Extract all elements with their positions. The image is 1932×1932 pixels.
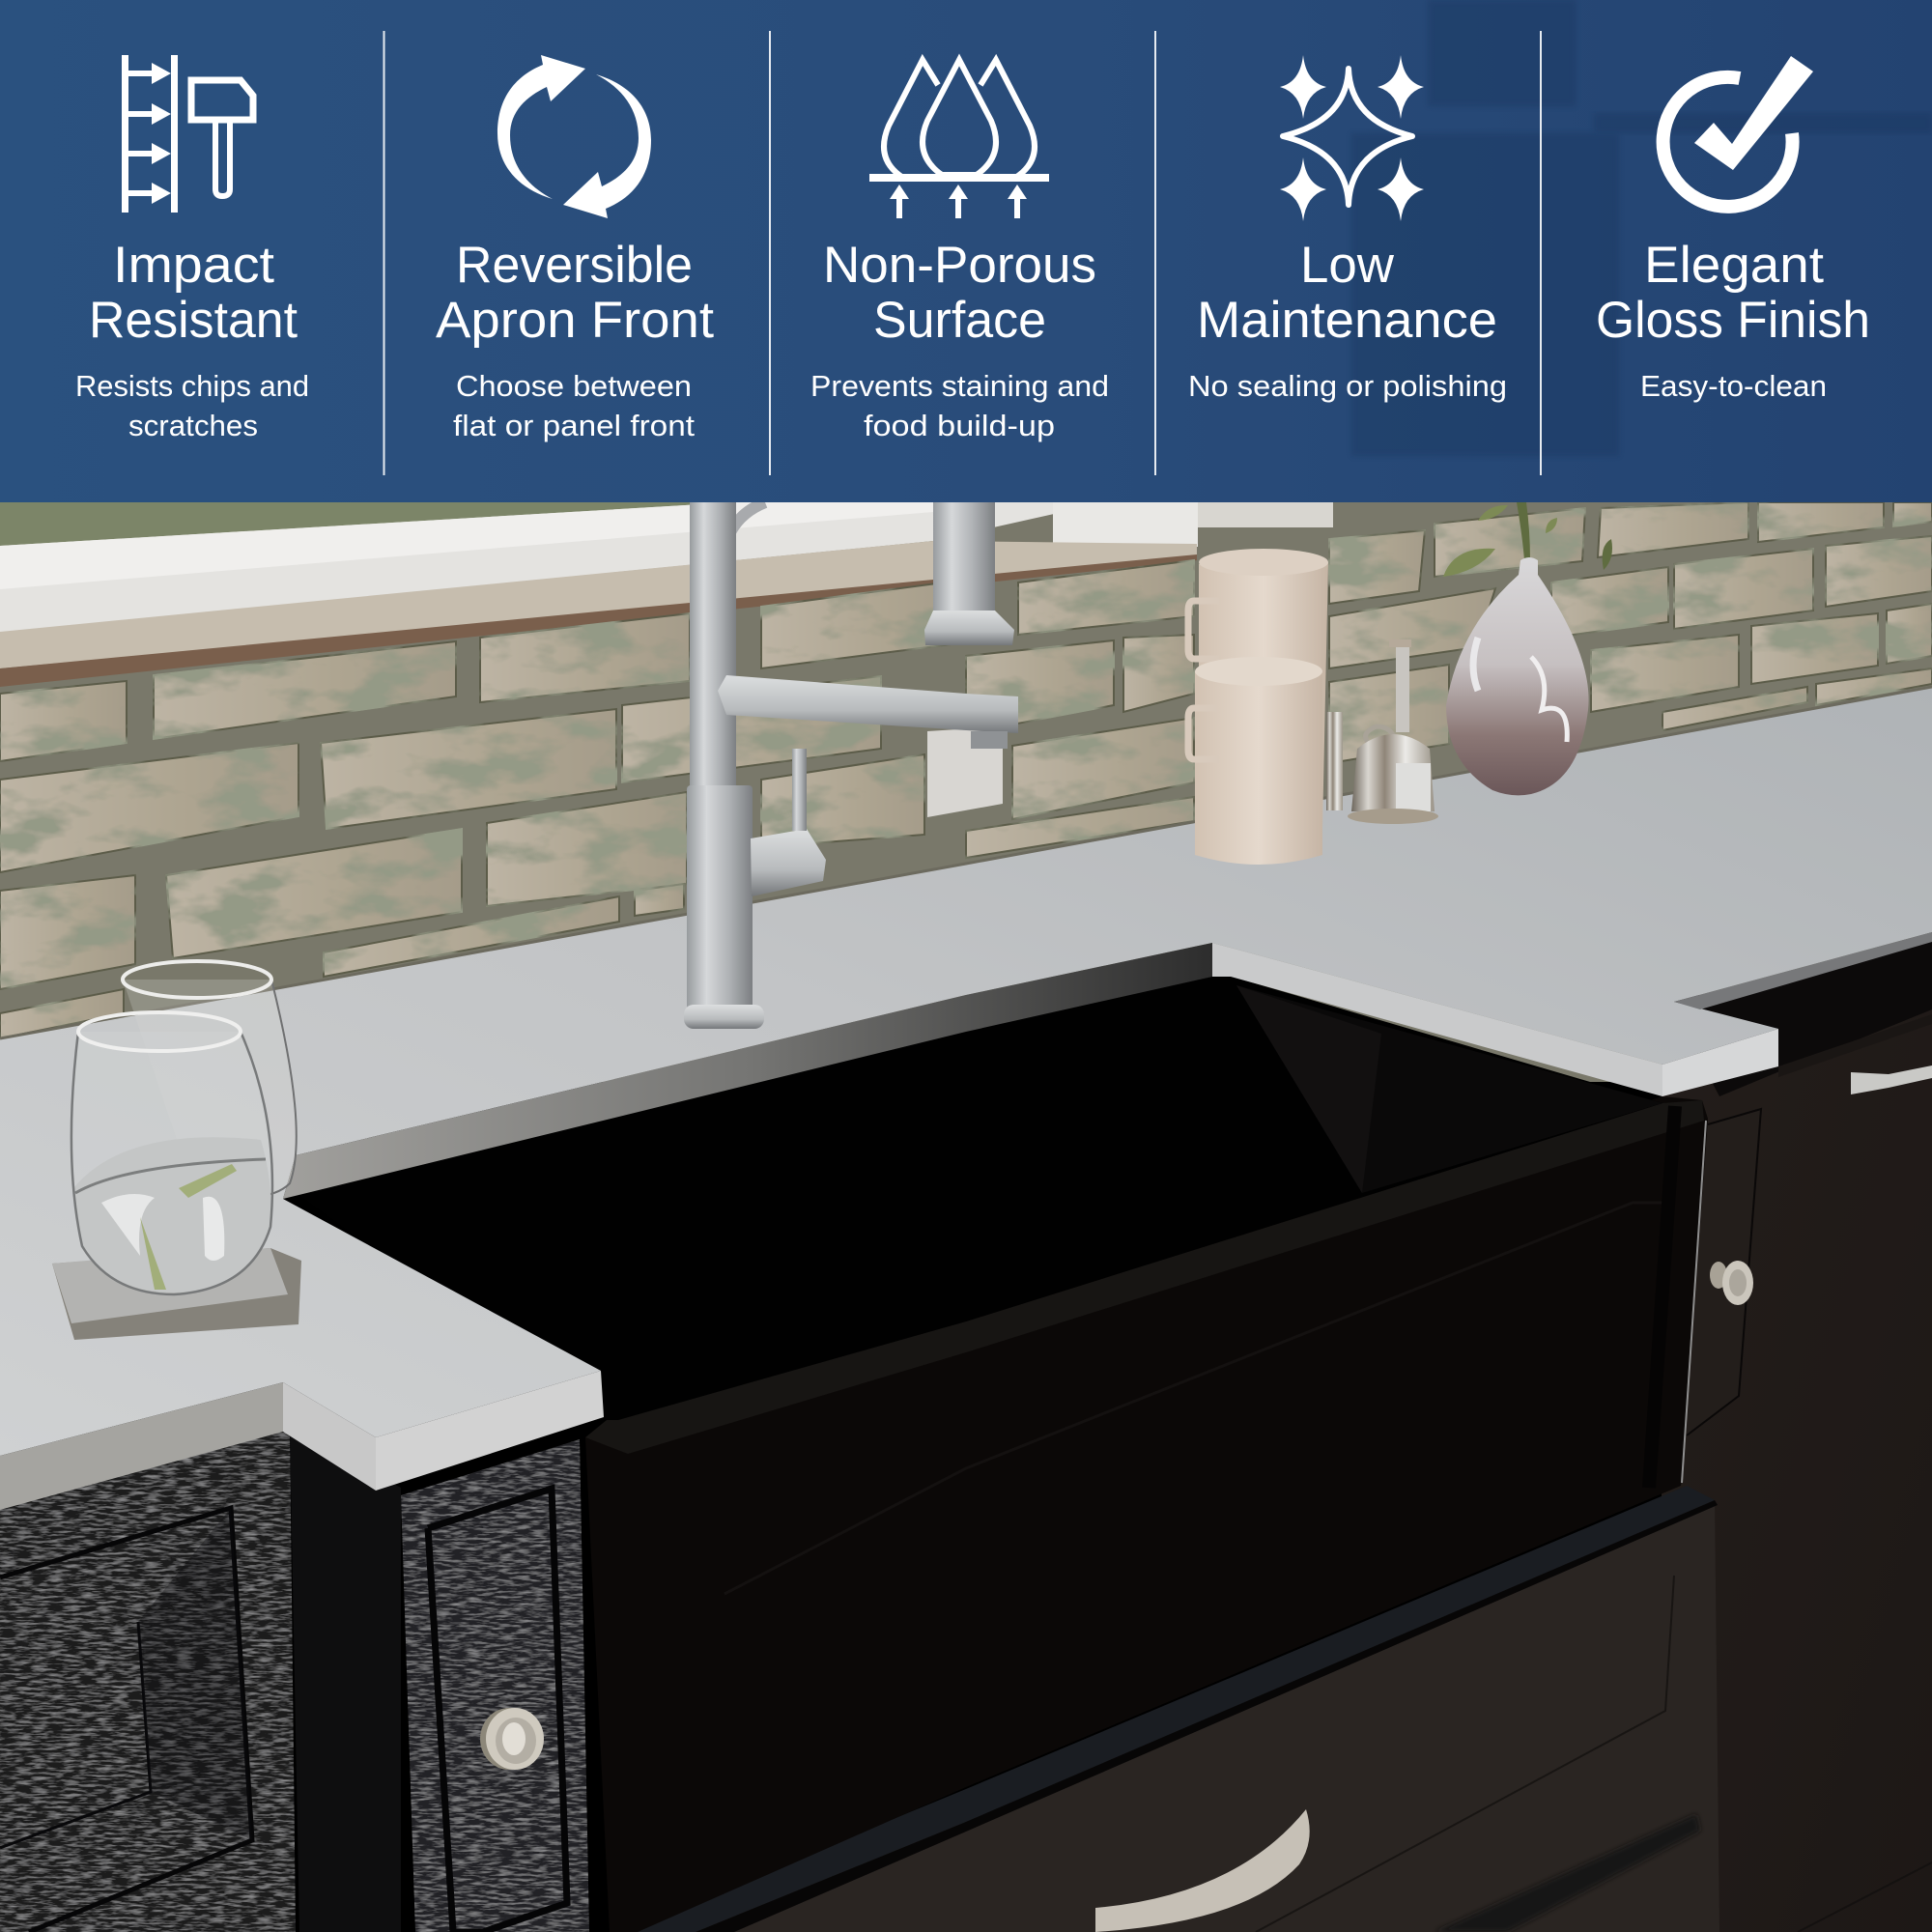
heading: Apron Front (436, 292, 714, 349)
heading: Reversible (456, 237, 693, 294)
left cabinet (0, 1430, 589, 1932)
icon: wall and hammer (125, 55, 253, 213)
heading (1197, 237, 1497, 349)
sink apron (585, 1096, 1708, 1932)
sink basin (283, 971, 1662, 1420)
heading (823, 237, 1096, 349)
panel: impact resistant (75, 55, 309, 442)
icon: reversing arrows (497, 55, 651, 218)
heading (436, 237, 714, 349)
countertop (0, 687, 1932, 1510)
panel: reversible apron front (436, 55, 714, 442)
brick wall (0, 502, 1932, 1038)
description: flat or panel front (453, 409, 695, 442)
heading: Gloss Finish (1596, 292, 1870, 349)
panel: non-porous surface (810, 60, 1109, 442)
description: food build-up (864, 409, 1055, 442)
description: No sealing or polishing (1188, 369, 1507, 403)
ceramic canisters (1188, 549, 1328, 865)
front glass with water (71, 1012, 272, 1294)
backsplash mortar (0, 502, 1932, 1082)
coaster (52, 1248, 301, 1340)
description (810, 369, 1109, 442)
vase (1446, 557, 1589, 795)
icon: check mark in ring (1663, 56, 1813, 207)
wall outlet (927, 726, 1003, 817)
panel: elegant gloss finish (1596, 56, 1870, 403)
heading (89, 237, 298, 349)
heading: Maintenance (1197, 292, 1497, 349)
description: scratches (128, 409, 258, 442)
right cabinets (618, 932, 1932, 1932)
icon: water drops on surface (869, 60, 1049, 218)
cabinet knob right (1710, 1261, 1753, 1305)
heading: Resistant (89, 292, 298, 349)
description: Resists chips and (75, 369, 309, 403)
leaves (1443, 502, 1612, 577)
description (75, 369, 309, 442)
faucet (684, 502, 1018, 1029)
divider lines (384, 31, 1541, 475)
back glass (123, 961, 297, 1197)
blue banner (0, 0, 1932, 502)
faded window reflections (1351, 0, 1932, 456)
panel: low maintenance (1188, 55, 1507, 403)
door pull upper right (1851, 1065, 1932, 1094)
description: Easy-to-clean (1640, 369, 1827, 403)
icon: sparkles (1280, 55, 1424, 221)
heading: Elegant (1644, 237, 1824, 294)
cabinet knob left (480, 1708, 544, 1770)
description (453, 369, 695, 442)
heading: Low (1300, 237, 1395, 294)
heading: Impact (113, 237, 274, 294)
heading: Non-Porous (823, 237, 1096, 294)
heading (1596, 237, 1870, 349)
heading: Surface (873, 292, 1046, 349)
metal mister bottles (1326, 639, 1438, 824)
drawer pull (1095, 1809, 1310, 1932)
description: Prevents staining and (810, 369, 1109, 403)
description: Choose between (456, 369, 692, 403)
window and sill (0, 502, 1333, 687)
